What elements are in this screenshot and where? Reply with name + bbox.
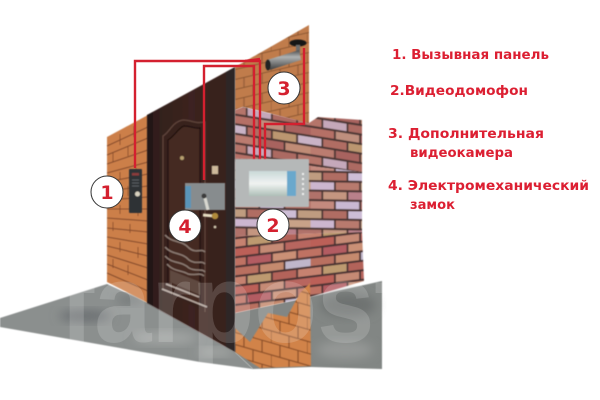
monitor screen — [249, 171, 296, 196]
wire: short top branch — [245, 59, 260, 61]
floor: left section — [0, 284, 253, 369]
camera body — [267, 50, 301, 70]
marker 4 — [169, 210, 201, 242]
door right frame — [226, 67, 235, 352]
marker 4: 4 — [178, 216, 192, 238]
door lower glossy panel — [170, 270, 200, 295]
legend item 1: 1. Вызывная панель — [392, 47, 549, 63]
legend — [388, 47, 589, 213]
left orange brick wall — [107, 115, 148, 303]
wire: call panel to monitor — [135, 61, 260, 168]
keyhole — [214, 226, 216, 228]
marker 2: 2 — [266, 215, 280, 237]
marker 1 — [91, 176, 123, 208]
lilac brick wall — [235, 107, 364, 313]
call panel speaker — [132, 173, 139, 176]
legend item 4 continued: замок — [410, 197, 455, 213]
watermark: farpost.ru — [60, 241, 540, 366]
call panel — [129, 169, 142, 213]
legend item 2: 2.Видеодомофон — [390, 83, 528, 99]
video intercom monitor — [235, 159, 309, 207]
camera ceiling mount — [290, 40, 306, 46]
door lower mouldings — [162, 284, 207, 307]
door handle — [203, 215, 214, 216]
monitor screen blue strip — [287, 171, 296, 196]
camera lens — [265, 60, 271, 70]
upper orange brick wall — [235, 25, 309, 124]
monitor buttons — [302, 173, 304, 196]
lock key — [205, 198, 208, 210]
wire: camera to monitor — [265, 48, 304, 161]
call button — [135, 192, 140, 196]
wiring — [135, 48, 304, 180]
legend item 3 continued: видеокамера — [410, 145, 513, 161]
door leaf — [147, 67, 235, 352]
marker 1: 1 — [100, 182, 114, 204]
legend item 3: 3. Дополнительная — [388, 126, 544, 142]
legend item 4: 4. Электромеханический — [388, 178, 589, 194]
camera — [265, 40, 306, 70]
lock blue strip — [185, 186, 191, 208]
door left frame — [147, 112, 153, 306]
door peephole — [180, 156, 184, 160]
lower orange brick cut-away — [235, 283, 311, 368]
door — [147, 67, 235, 352]
wire: lock to monitor — [204, 66, 254, 180]
door wave mouldings — [165, 235, 205, 276]
marker 3 — [268, 72, 300, 104]
door top plate — [212, 166, 218, 174]
marker 2 — [257, 209, 289, 241]
electromechanical lock — [185, 183, 225, 228]
door arch panel — [163, 120, 205, 312]
floor: right section — [235, 281, 382, 369]
camera bracket — [296, 45, 300, 60]
marker 3: 3 — [277, 78, 291, 100]
